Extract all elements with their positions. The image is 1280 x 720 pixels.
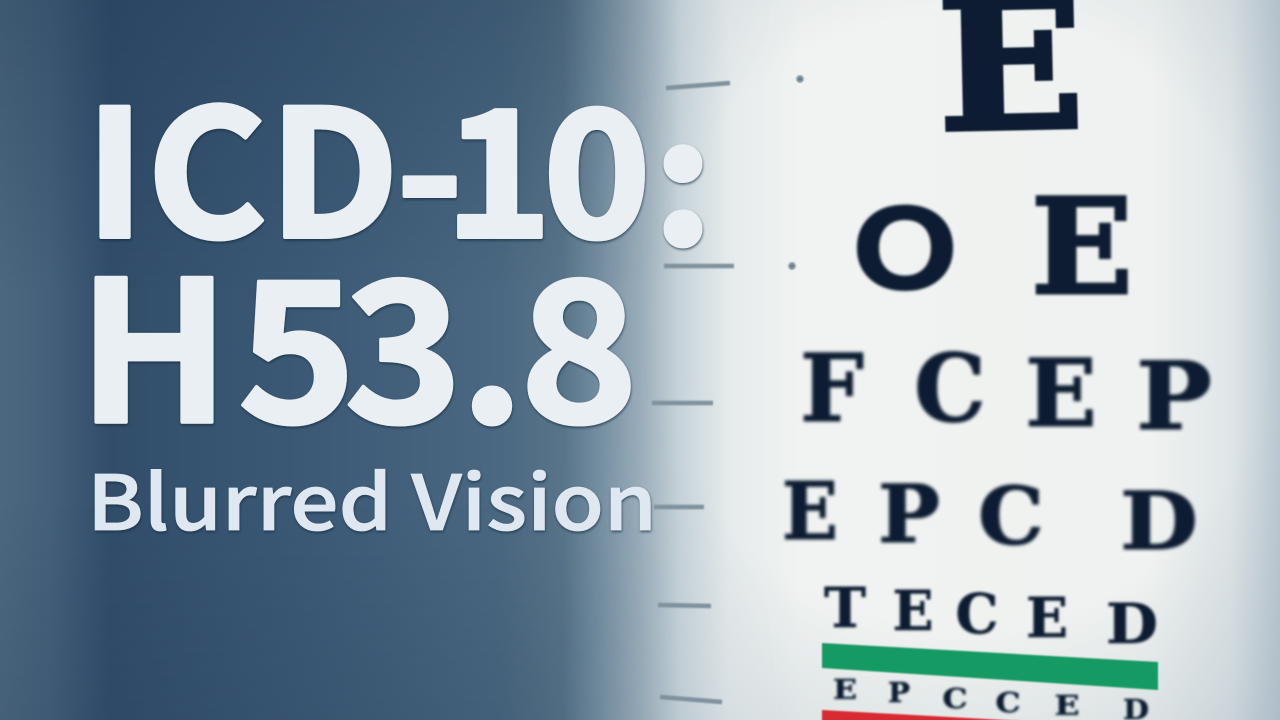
chart row 6: C xyxy=(942,684,968,715)
chart row 2 xyxy=(854,170,1133,325)
chart row 5: C xyxy=(956,581,998,646)
chart row 4: E xyxy=(782,464,838,558)
title line 1: ICD-10 xyxy=(85,33,651,288)
red chart bar xyxy=(822,710,1040,720)
chart row 3: C xyxy=(914,334,986,444)
chart row 5: T xyxy=(824,575,866,640)
title line 2: H53.8 xyxy=(78,196,638,479)
chart row 4: P xyxy=(878,467,940,561)
chart row 3: E xyxy=(1025,339,1097,449)
title line 1: : xyxy=(654,43,712,293)
subtitle: Blurred Vision xyxy=(87,442,657,552)
chart row 5: E xyxy=(1026,585,1068,650)
chart row 6: C xyxy=(996,688,1020,719)
chart row 4 xyxy=(782,464,1198,568)
chart row 5: E xyxy=(892,578,934,643)
chart row 2: E xyxy=(1031,170,1133,325)
chart row 3: F xyxy=(800,334,864,444)
chart row 5 xyxy=(824,575,1158,656)
green chart bar xyxy=(822,643,1158,690)
chart row 2: O xyxy=(854,189,956,311)
eye chart letters xyxy=(782,0,1212,720)
chart row 3 xyxy=(800,334,1212,452)
chart row 3: P xyxy=(1136,342,1212,452)
chart row 4: C xyxy=(978,469,1044,563)
chart row 6 xyxy=(833,675,1149,720)
eye chart tick marks xyxy=(652,78,802,702)
chart row 4: D xyxy=(1120,474,1198,568)
chart row 6: E xyxy=(833,675,857,706)
chart row 5: D xyxy=(1106,591,1158,656)
title xyxy=(78,33,712,552)
chart row 6: P xyxy=(888,678,910,709)
